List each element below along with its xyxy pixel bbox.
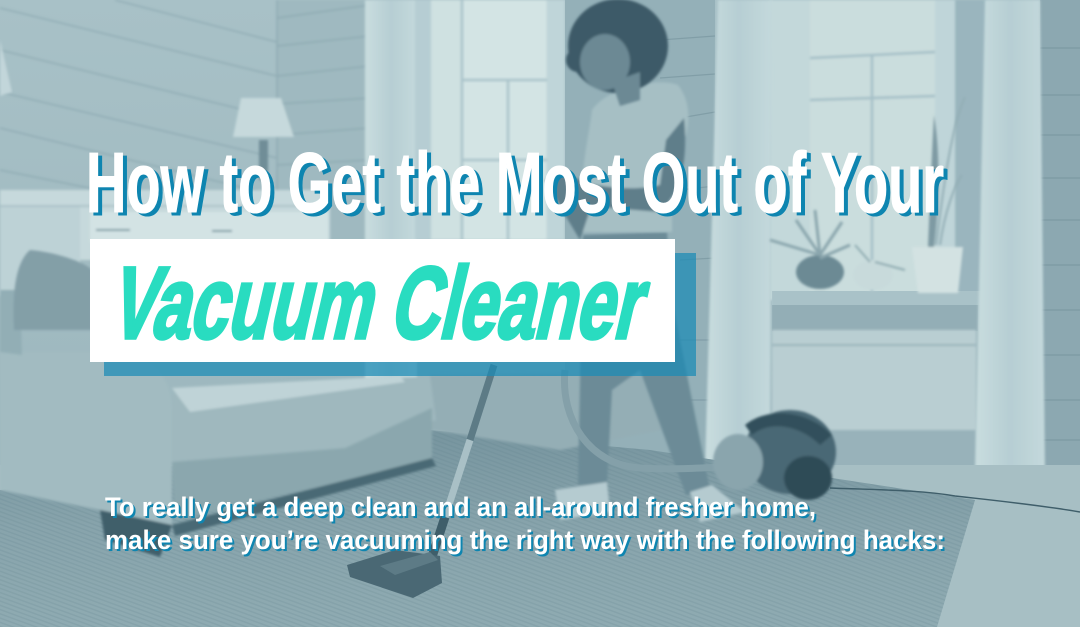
intro text [105,492,947,557]
vacuum nozzle [347,550,442,598]
radiator [770,330,976,472]
vacuum cleaner body [713,410,836,500]
cable [830,488,1080,512]
right window [770,0,987,300]
window sill [772,291,986,305]
window plants [770,97,965,293]
carpet [0,430,975,627]
intro text: make sure you’re vacuuming the right way with the following hacks: [107,527,947,557]
woman: torso and arms [545,82,688,240]
intro text: make sure you’re vacuuming the right way with the following hacks: [105,525,945,555]
sofa [0,250,662,557]
blue offset band behind label [104,253,696,376]
woman: head and hair [566,0,668,106]
left curtain and window [365,0,565,380]
floor [0,465,1080,627]
wall behind woman [565,0,715,470]
table lamp [233,98,294,180]
intro text: To really get a deep clean and an all-around fresher home, [107,494,818,524]
white title label box [90,239,675,362]
sideboard [0,190,330,296]
vacuum hose and pole [432,365,725,557]
highlighted heading: Vacuum Cleaner: Vacuum Cleaner [103,245,659,360]
woman: legs [555,232,745,522]
curtains middle and right [705,0,1045,475]
intro text: To really get a deep clean and an all-around fresher home, [105,492,816,522]
wall planks left [0,0,370,240]
right wall [1040,0,1080,470]
left table lamp shade [0,40,12,96]
